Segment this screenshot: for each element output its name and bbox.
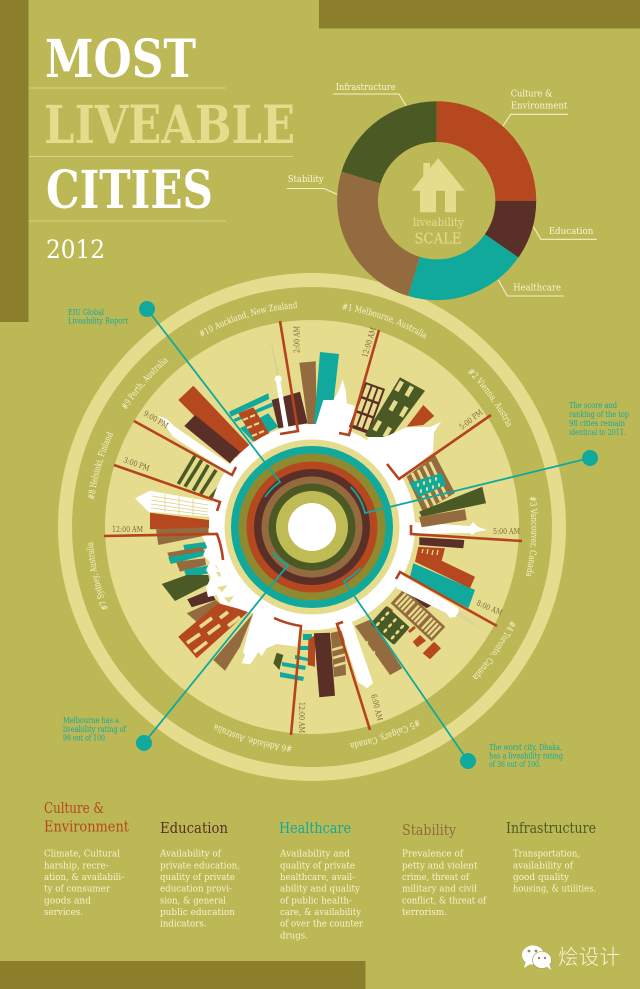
donut label: stability: Stability (288, 175, 325, 185)
city rank labels: #4 Toronto, Canada (472, 621, 516, 680)
city rank labels: #8 Helsinki, Finland (88, 432, 114, 500)
city rank labels: #7 Sydney, Australia (86, 542, 108, 610)
title: LIVEABLE (44, 95, 295, 156)
city rank labels: #2 Vienna, Austria (468, 369, 511, 428)
time labels: 12:00 AM (297, 702, 306, 733)
column: stability: Prevalence of (402, 850, 464, 860)
donut chart: liveability scale (337, 101, 536, 300)
column: culture and environment: Environment (44, 820, 129, 836)
column: education: sion, & general (160, 896, 226, 906)
callout: EIU report (68, 301, 280, 497)
callout: Melbourne rating (63, 553, 288, 751)
donut centre text (413, 216, 465, 247)
column: stability: conflict, & threat of (402, 896, 487, 906)
big circular city chart (58, 273, 629, 781)
donut label: culture and environment: Culture & (511, 90, 552, 100)
column: healthcare: healthcare, avail- (280, 873, 355, 883)
column: healthcare: ability and quality (280, 885, 361, 895)
time labels: 5:00 AM (493, 527, 520, 536)
column: stability: terrorism. (402, 908, 447, 918)
city rank labels: #10 Auckland, New Zealand (200, 301, 298, 337)
column: healthcare (279, 821, 364, 941)
city rank labels: #9 Perth, Australia (122, 358, 168, 410)
callout: Melbourne rating: liveability rating of (63, 724, 127, 734)
donut label: culture and environment: Environment (511, 101, 568, 111)
column: healthcare: of over the counter (280, 920, 364, 930)
column: healthcare: Availability and (279, 850, 350, 860)
column: infrastructure: Transportation, (513, 850, 580, 860)
watermark: wechat logo and name (522, 940, 620, 970)
skyline: bottom-left white blocks (202, 530, 300, 664)
column: education: public education (160, 908, 235, 918)
column: stability: military and civil (402, 885, 477, 895)
column: culture and environment: ation, & availabili- (44, 873, 124, 883)
segment: education (485, 201, 536, 258)
time labels: 9:00 PM (142, 409, 170, 430)
column: stability: crime, threat of (402, 873, 470, 883)
skyline: right buildings (407, 455, 487, 608)
callout: Melbourne rating: 98 out of 100 (63, 732, 105, 742)
bottom dark bar (0, 961, 366, 989)
column: infrastructure: availability of (513, 861, 574, 871)
time labels (112, 326, 520, 733)
city rank labels: #1 Melbourne, Australia (342, 304, 426, 339)
column: education: education provi- (160, 885, 232, 895)
concentric rings (224, 440, 400, 614)
donut label: culture and environment (503, 90, 568, 126)
skyline: bottom buildings (273, 619, 402, 697)
time labels: 12:00 AM (112, 525, 143, 534)
column: infrastructure: housing, & utilities. (513, 885, 596, 895)
column: stability (402, 823, 487, 918)
outer cream ring (58, 273, 566, 781)
skyline: bottom-left buildings (178, 603, 253, 671)
segment: infrastructure (342, 101, 437, 184)
column: healthcare: of public health- (280, 896, 352, 906)
top dark bar (319, 0, 640, 28)
column: culture and environment: ty of consumer (44, 885, 111, 895)
title: MOST (45, 29, 196, 90)
skyline: left buildings (135, 456, 227, 623)
column: stability: Stability (402, 823, 457, 839)
column: culture and environment: services. (44, 908, 83, 918)
column: education (159, 821, 240, 930)
city rank labels (86, 301, 538, 752)
segment: healthcare (408, 234, 518, 300)
icon: house (412, 158, 465, 212)
time labels: 8:00 AM (475, 599, 504, 617)
skyline: top-right buildings (314, 377, 484, 631)
time labels: 3:00 PM (122, 455, 151, 473)
column: stability: petty and violent (402, 861, 478, 871)
donut label: stability (287, 175, 337, 194)
time labels: 2:00 AM (292, 326, 302, 353)
callout: worst city: The worst city, Dhaka, (489, 742, 562, 752)
callout: EIU report: Liveability Report (68, 316, 129, 326)
time labels: 6:00 AM (369, 693, 384, 722)
callout: worst city (344, 568, 563, 769)
icon: chat bubbles (522, 946, 552, 970)
callout: score and ranking (351, 400, 629, 513)
column: education: quality of private (160, 873, 235, 883)
column: culture and environment: Climate, Cultural (44, 850, 120, 860)
callout: worst city: of 36 out of 100. (489, 759, 541, 769)
column: healthcare: Healthcare (279, 821, 351, 837)
donut label: healthcare (498, 280, 564, 296)
olive band holding city names (72, 287, 552, 767)
callout: score and ranking: identical to 2011. (569, 427, 626, 437)
column: culture and environment (44, 801, 129, 918)
donut label: infrastructure (333, 83, 406, 106)
column: education: Education (160, 821, 228, 837)
donut centre text: SCALE (414, 229, 462, 247)
column: infrastructure (506, 821, 596, 895)
title: CITIES (46, 160, 213, 221)
skyline: bottom-right buildings (370, 585, 445, 659)
column: healthcare: drugs. (280, 931, 308, 941)
column: healthcare: care, & availability (280, 908, 362, 918)
watermark: wechat logo and name: 烩设计 (558, 940, 620, 970)
column: infrastructure: good quality (513, 873, 570, 883)
column: culture and environment: goods and (44, 896, 91, 906)
white central base (209, 424, 415, 630)
callout: score and ranking: The score and (569, 400, 617, 410)
column: education: Availability of (159, 850, 222, 860)
donut label: education (533, 227, 597, 239)
column: education: private education, (160, 861, 240, 871)
time labels: 5:00 PM (458, 408, 485, 432)
city rank labels: #3 Vancouver, Canada (526, 496, 538, 576)
donut label: infrastructure: Infrastructure (336, 83, 396, 93)
inner cream disc (105, 320, 519, 734)
column: infrastructure: Infrastructure (506, 821, 596, 837)
time labels: 12:00 AM (360, 326, 378, 359)
donut label: healthcare: Healthcare (513, 284, 561, 294)
city rank labels: #5 Calgary, Canada (350, 720, 420, 749)
title: 2012 (46, 235, 105, 264)
column: culture and environment: Culture & (44, 801, 104, 817)
column: healthcare: quality of private (280, 861, 355, 871)
callout: Melbourne rating: Melbourne has a (63, 715, 119, 725)
donut label: education: Education (549, 227, 594, 237)
skyline: top-left buildings (158, 343, 339, 472)
title (29, 29, 295, 264)
segment: stability (337, 172, 420, 296)
callout: worst city: has a liveability rating (489, 750, 563, 760)
donut centre text: liveability (413, 216, 465, 229)
callout: score and ranking: 98 cities remain (569, 418, 626, 428)
time spokes (104, 321, 522, 735)
city rank labels: #6 Adelaide, Australia (214, 724, 292, 752)
column: culture and environment: harship, recre- (44, 861, 108, 871)
segment: culture and environment (437, 101, 536, 201)
left dark bar (0, 0, 28, 322)
callout: EIU report: EIU Global (68, 307, 104, 317)
column: education: indicators. (160, 920, 207, 930)
